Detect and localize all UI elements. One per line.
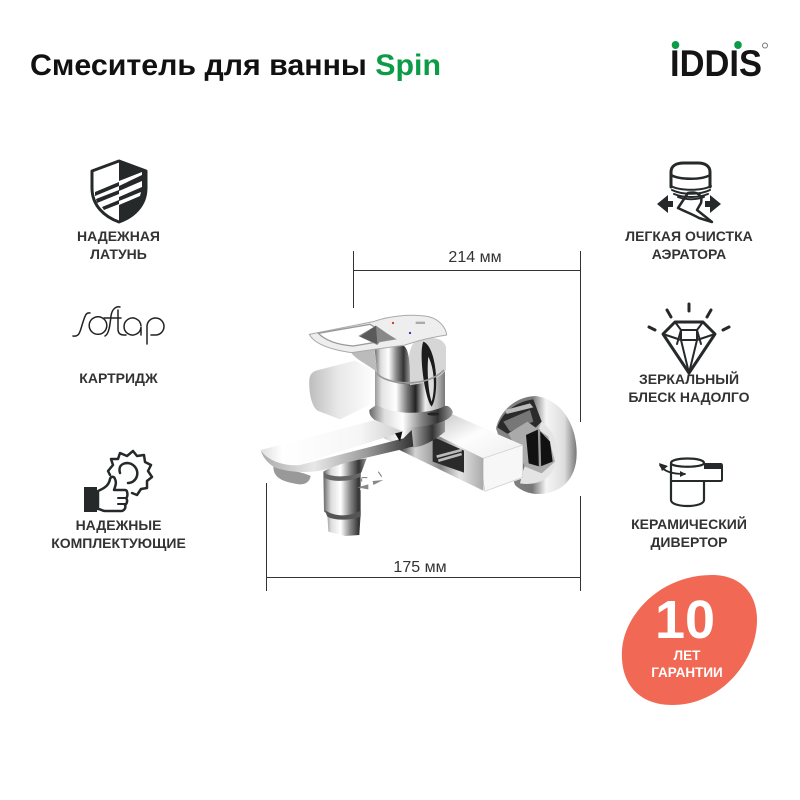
label: mirror shine [628,370,750,405]
label: easy aerator cleaning: ЛЕГКАЯ ОЧИСТКА [625,228,753,244]
icon: aerator cleaning [657,163,721,222]
back plate [309,361,373,419]
icon: thumbs up with gear [84,451,152,512]
handle ring [352,335,377,373]
label: mirror shine: БЛЕСК НАДОЛГО [628,389,750,405]
diverter outlet [323,458,367,536]
label: easy aerator cleaning: АЭРАТОРА [652,246,726,262]
faucet image [261,315,577,536]
dimension: 214 mm [354,249,580,422]
logo: IDDIS: IDDIS [670,43,762,84]
label: ceramic diverter: КЕРАМИЧЕСКИЙ [631,515,747,532]
label: easy aerator cleaning [625,228,753,262]
badge text: ГАРАНТИИ [651,665,723,680]
label: ceramic diverter: ДИВЕРТОР [650,534,728,550]
icon: shield [92,161,146,222]
diverter lever [357,466,387,492]
badge blob [622,575,757,705]
mixer body [398,411,523,492]
badge text: ЛЕТ [674,648,701,663]
warranty badge [622,575,757,705]
lower collar [375,418,445,448]
label: reliable brass: НАДЕЖНАЯ [77,228,160,244]
wall flange [496,396,577,494]
label: reliable components [51,517,186,551]
dimension: 175 mm [266,483,580,591]
badge text [651,648,723,680]
icon: ceramic diverter [659,458,722,506]
dimension: 214 mm: 214 мм [448,249,502,266]
icon: diamond [649,304,729,373]
badge number: 10 [655,590,715,650]
dimension: 175 mm: 175 мм [393,559,447,576]
label: reliable components: НАДЕЖНЫЕ [76,517,161,533]
handle cap [309,315,447,407]
collar ring [369,405,453,427]
label: reliable components: КОМПЛЕКТУЮЩИЕ [51,535,186,551]
label: reliable brass [77,228,160,262]
upper mixer column [375,365,445,422]
spout [261,420,413,484]
label: reliable brass: ЛАТУНЬ [90,246,147,262]
logo: softap [73,307,164,344]
title: Смеситель для ванны Spin [30,49,441,82]
label: cartridge: КАРТРИДЖ [79,370,158,386]
label: ceramic diverter [631,515,747,550]
label: mirror shine: ЗЕРКАЛЬНЫЙ [639,370,739,387]
